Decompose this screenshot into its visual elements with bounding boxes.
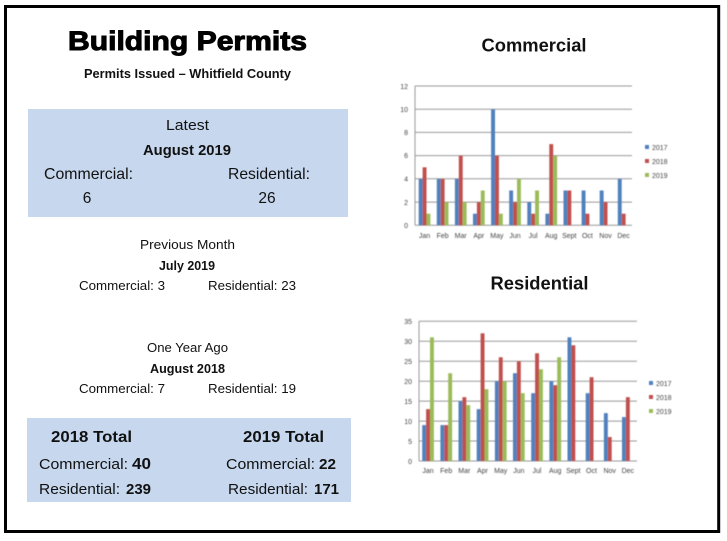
2019 residential total [228,482,339,498]
bar chart: commercial: Jul [529,233,538,240]
2019 commercial total: Commercial: [226,457,315,473]
legend: commercial: 2019 [652,173,668,180]
bar chart: residential: May [494,468,508,475]
bar chart: commercial: 12 [400,84,408,91]
title: Building Permits [68,26,307,56]
bar chart: commercial: 6 [404,153,408,160]
bar chart: commercial: Sept [562,233,577,240]
panel: one year ago [79,341,296,396]
bar chart: commercial: Feb [437,233,449,240]
bar chart: residential: 30 [404,339,412,346]
bar chart: commercial: Mar [455,233,467,240]
bar chart: commercial [400,84,668,240]
2019 total heading: 2019 Total [243,429,324,446]
2019 residential total: Residential: [228,482,308,498]
bar chart: commercial: 2 [404,200,408,207]
bar chart: residential: Oct [586,468,597,475]
bar chart: residential: Dec [622,468,635,475]
bar chart: residential: Jan [422,468,434,475]
bar chart: residential: Jun [513,468,525,475]
latest residential value: 26 [258,190,276,207]
bar chart: residential: 25 [404,359,412,366]
latest month: August 2019 [143,142,231,159]
legend: residential: 2019 [656,409,672,416]
bar chart: residential: 10 [404,419,412,426]
bar chart: commercial: 0 [404,223,408,230]
2018 total heading: 2018 Total [51,429,132,446]
bar chart: residential: Nov [603,468,616,475]
2018 residential total: Residential: [39,482,120,498]
legend: residential: 2017 [656,381,672,388]
bar chart: residential: Jul [533,468,542,475]
latest label: Latest [166,118,209,134]
bar chart: residential [404,319,672,475]
one year ago residential: Residential: 19 [208,382,296,396]
latest commercial value: 6 [83,190,91,207]
legend: commercial: 2017 [652,145,668,152]
2018 residential total [39,482,151,498]
2019 residential total: 171 [314,482,339,498]
bar chart: commercial: 8 [404,130,408,137]
panel: latest [28,109,348,217]
subtitle: Permits Issued – Whitfield County [84,67,291,81]
legend: residential [649,381,672,416]
bar chart: residential: Apr [477,468,489,475]
bar chart: commercial: Apr [473,233,485,240]
2018 commercial total: 40 [132,456,151,473]
panel: previous month [79,238,296,293]
previous month name: July 2019 [159,259,215,273]
bar chart: commercial: Aug [545,233,558,240]
bar chart: commercial: Nov [599,233,612,240]
legend: residential: 2018 [656,395,672,402]
bar chart: residential: 20 [404,379,412,386]
2018 residential total: 239 [126,482,151,498]
one year ago label: One Year Ago [147,341,228,355]
heading: commercial: Commercial [482,34,586,56]
bar chart: residential: Mar [458,468,471,475]
legend: commercial: 2018 [652,159,668,166]
bar chart: commercial: 10 [400,107,408,114]
previous residential: Residential: 23 [208,279,296,293]
latest residential label: Residential: [228,166,310,183]
panel: totals [27,418,351,502]
2018 commercial total: Commercial: [39,457,128,473]
legend: commercial [645,145,668,180]
bar chart: commercial: Jun [509,233,521,240]
bar chart: residential: Aug [549,468,562,475]
bar chart: commercial: 4 [404,176,408,184]
bar chart: residential: Feb [440,468,452,475]
one year ago commercial: Commercial: 7 [79,382,165,396]
bar chart: residential: 0 [408,459,412,466]
previous month label: Previous Month [140,238,235,252]
2019 commercial total: 22 [319,457,336,473]
heading: residential: Residential [490,272,588,293]
bar chart: residential: 15 [404,399,412,406]
bar chart: commercial: Jan [419,233,430,240]
bar chart: residential: 5 [408,439,412,446]
one year ago month: August 2018 [150,362,225,376]
latest commercial label: Commercial: [44,166,133,183]
bar chart: residential: 35 [404,319,412,326]
bar chart: commercial: Dec [617,233,630,240]
bar chart: residential: Sept [566,468,581,475]
bar chart: commercial: May [490,233,504,240]
2018 commercial total [39,456,151,473]
previous commercial: Commercial: 3 [79,279,165,293]
bar chart: commercial: Oct [582,233,593,240]
